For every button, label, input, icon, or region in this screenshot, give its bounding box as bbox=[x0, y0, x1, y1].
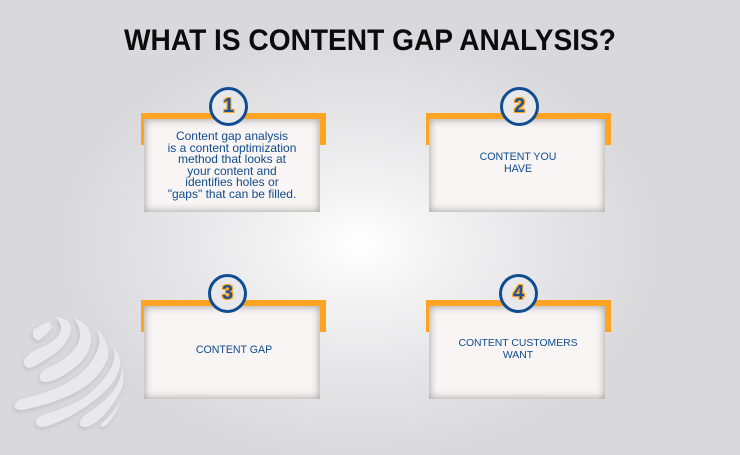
orange bracket bbox=[426, 113, 611, 145]
panel: card 1 bbox=[141, 113, 326, 212]
orange bracket bbox=[426, 300, 611, 332]
panel: card 3 bbox=[141, 300, 326, 399]
card body bbox=[144, 119, 320, 212]
text: content you have: HAVE bbox=[504, 163, 532, 175]
card body bbox=[429, 306, 605, 399]
text: definition: is a content optimization bbox=[168, 140, 296, 154]
text: content customers want bbox=[458, 338, 578, 361]
number badge 3: 3 bbox=[222, 282, 233, 304]
panel: card 4 bbox=[426, 300, 611, 399]
number badge 4 bbox=[499, 274, 538, 313]
number badge 4: 4 bbox=[513, 282, 524, 304]
text: definition: identifies holes or bbox=[185, 175, 279, 189]
text: definition: Content gap analysis bbox=[176, 129, 288, 143]
card body bbox=[144, 306, 320, 399]
text: definition bbox=[168, 129, 296, 200]
card body bbox=[429, 119, 605, 212]
orange bracket bbox=[141, 300, 326, 332]
text: definition: your content and bbox=[187, 164, 277, 178]
number badge 1 bbox=[209, 87, 248, 126]
title: WHAT IS CONTENT GAP ANALYSIS? bbox=[124, 24, 616, 57]
number badge 2: 2 bbox=[514, 95, 525, 117]
text: content customers want: CONTENT CUSTOMERS bbox=[458, 338, 578, 349]
text: content gap: CONTENT GAP bbox=[196, 344, 272, 356]
number badge 2 bbox=[500, 87, 539, 126]
number badge 3 bbox=[208, 274, 247, 313]
icon: globe watermark bbox=[13, 317, 124, 430]
text: content you have: CONTENT YOU bbox=[480, 151, 556, 163]
orange bracket bbox=[141, 113, 326, 145]
text: content customers want: WANT bbox=[503, 350, 533, 361]
panel: card 2 bbox=[426, 113, 611, 212]
text: definition: method that looks at bbox=[178, 152, 286, 166]
text: definition: "gaps" that can be filled. bbox=[168, 186, 296, 200]
number badge 1: 1 bbox=[223, 95, 234, 117]
text: content you have bbox=[480, 151, 556, 175]
